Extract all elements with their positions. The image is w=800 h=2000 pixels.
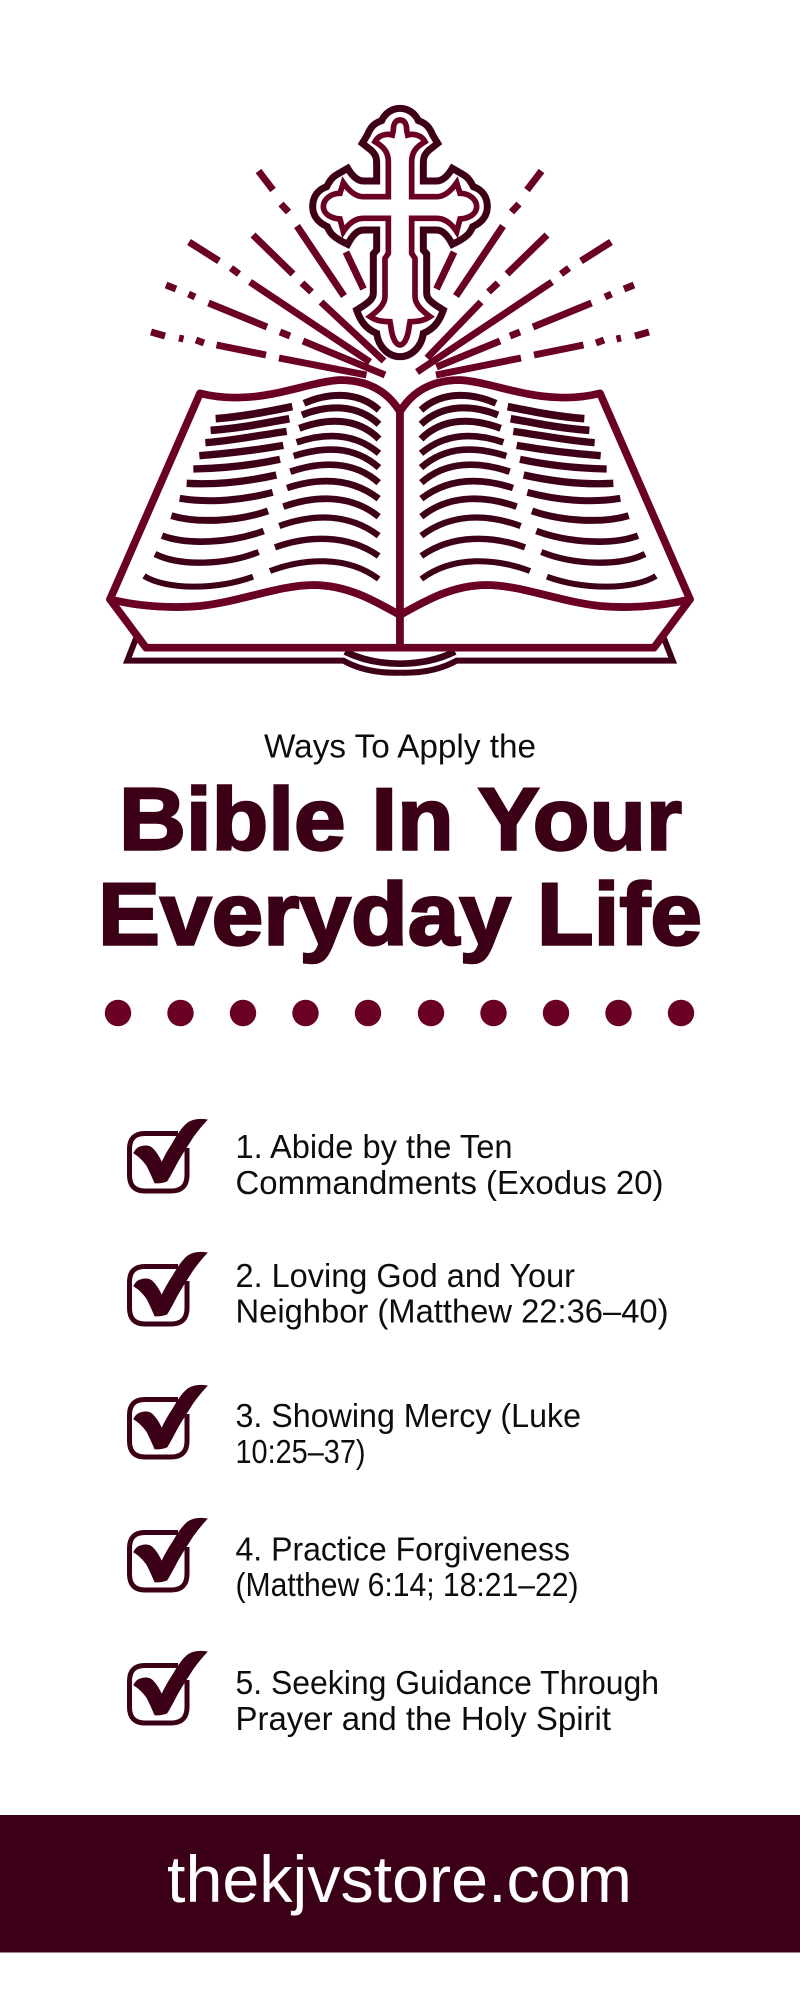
list item 4: [130, 1518, 578, 1603]
book right half: [400, 380, 690, 673]
icon: rays of light: [151, 171, 649, 375]
dotted divider: [105, 1000, 694, 1026]
list item 1: 1. Abide by the Ten: [236, 1128, 512, 1165]
list item 4: (Matthew 6:14; 18:21–22): [236, 1566, 578, 1603]
list item 2: Neighbor (Matthew 22:36–40): [236, 1292, 668, 1330]
icon: checkbox 3: [130, 1385, 207, 1457]
list item 5: 5. Seeking Guidance Through: [236, 1664, 659, 1701]
icon: checkbox 4: [130, 1518, 207, 1590]
list item 2: [130, 1252, 668, 1330]
icon: cross: [313, 108, 487, 357]
book left half: [110, 380, 400, 673]
list item 4: 4. Practice Forgiveness: [236, 1530, 570, 1568]
subtitle: Ways To Apply the: [264, 728, 536, 764]
list item 5: [130, 1651, 659, 1737]
list item 5: Prayer and the Holy Spirit: [236, 1700, 611, 1737]
list item 3: 10:25–37): [236, 1433, 366, 1470]
footer band: [0, 1815, 800, 1952]
footer website url: thekjvstore.com: [167, 1842, 632, 1916]
title: Bible In Your: [119, 770, 682, 868]
icon: checkbox 5: [130, 1651, 207, 1723]
title: Everyday Life: [98, 864, 702, 964]
icon: checkbox 2: [130, 1252, 207, 1324]
list item 3: 3. Showing Mercy (Luke: [236, 1397, 581, 1434]
list item 1: [130, 1119, 664, 1201]
list item 1: Commandments (Exodus 20): [236, 1164, 664, 1201]
list item 2: 2. Loving God and Your: [236, 1257, 575, 1294]
icon: open book: [110, 380, 690, 673]
icon: checkbox 1: [130, 1119, 207, 1191]
title: [98, 770, 702, 964]
list item 3: [130, 1385, 581, 1470]
